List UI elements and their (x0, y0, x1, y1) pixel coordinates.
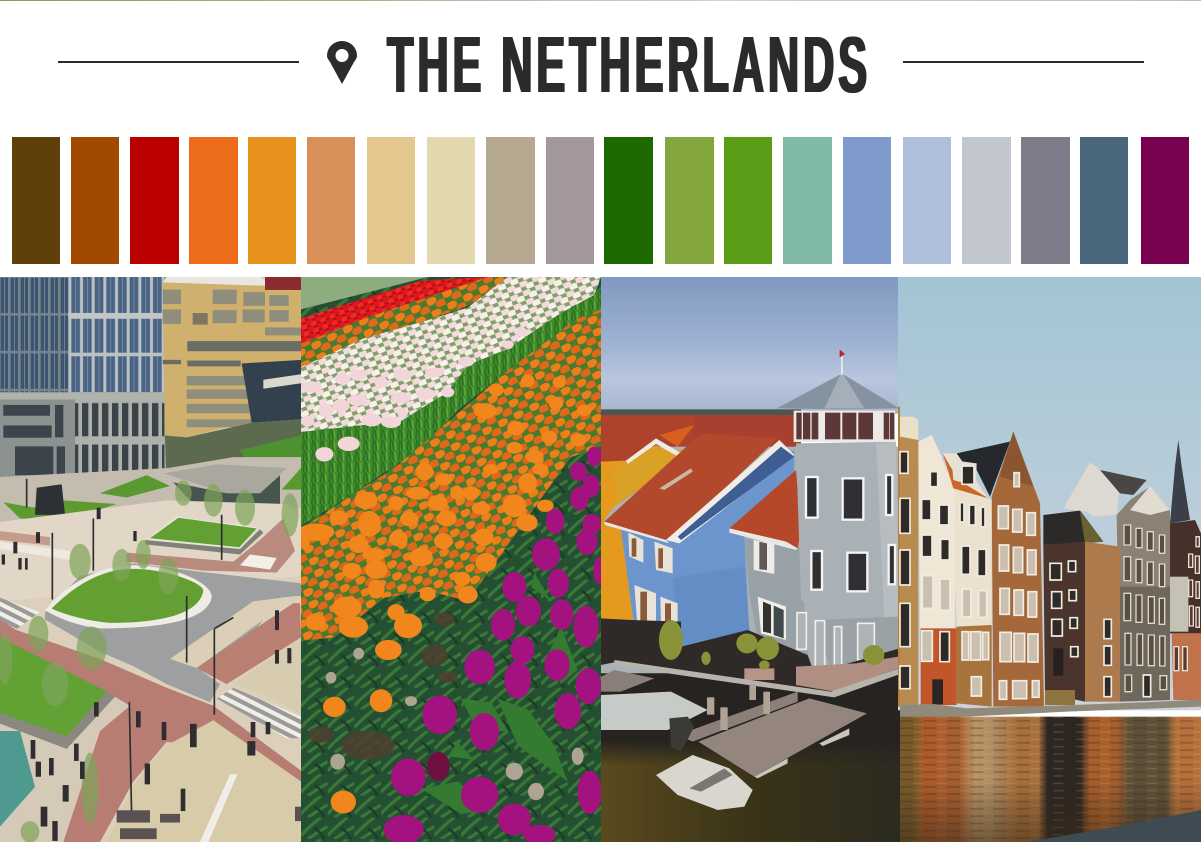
photo: tulip field (301, 277, 601, 842)
title block with rules, pin and heading (58, 20, 1144, 109)
top edge strip (0, 0, 1201, 1)
photo: Amsterdam canal houses (898, 277, 1201, 842)
icon: location pin (327, 41, 357, 84)
heading: THE NETHERLANDS (386, 20, 870, 109)
photo: city square with glass tower and lawns (0, 277, 301, 842)
photo: waterfront houses and tower (601, 277, 900, 842)
colour palette swatches (12, 137, 1189, 264)
